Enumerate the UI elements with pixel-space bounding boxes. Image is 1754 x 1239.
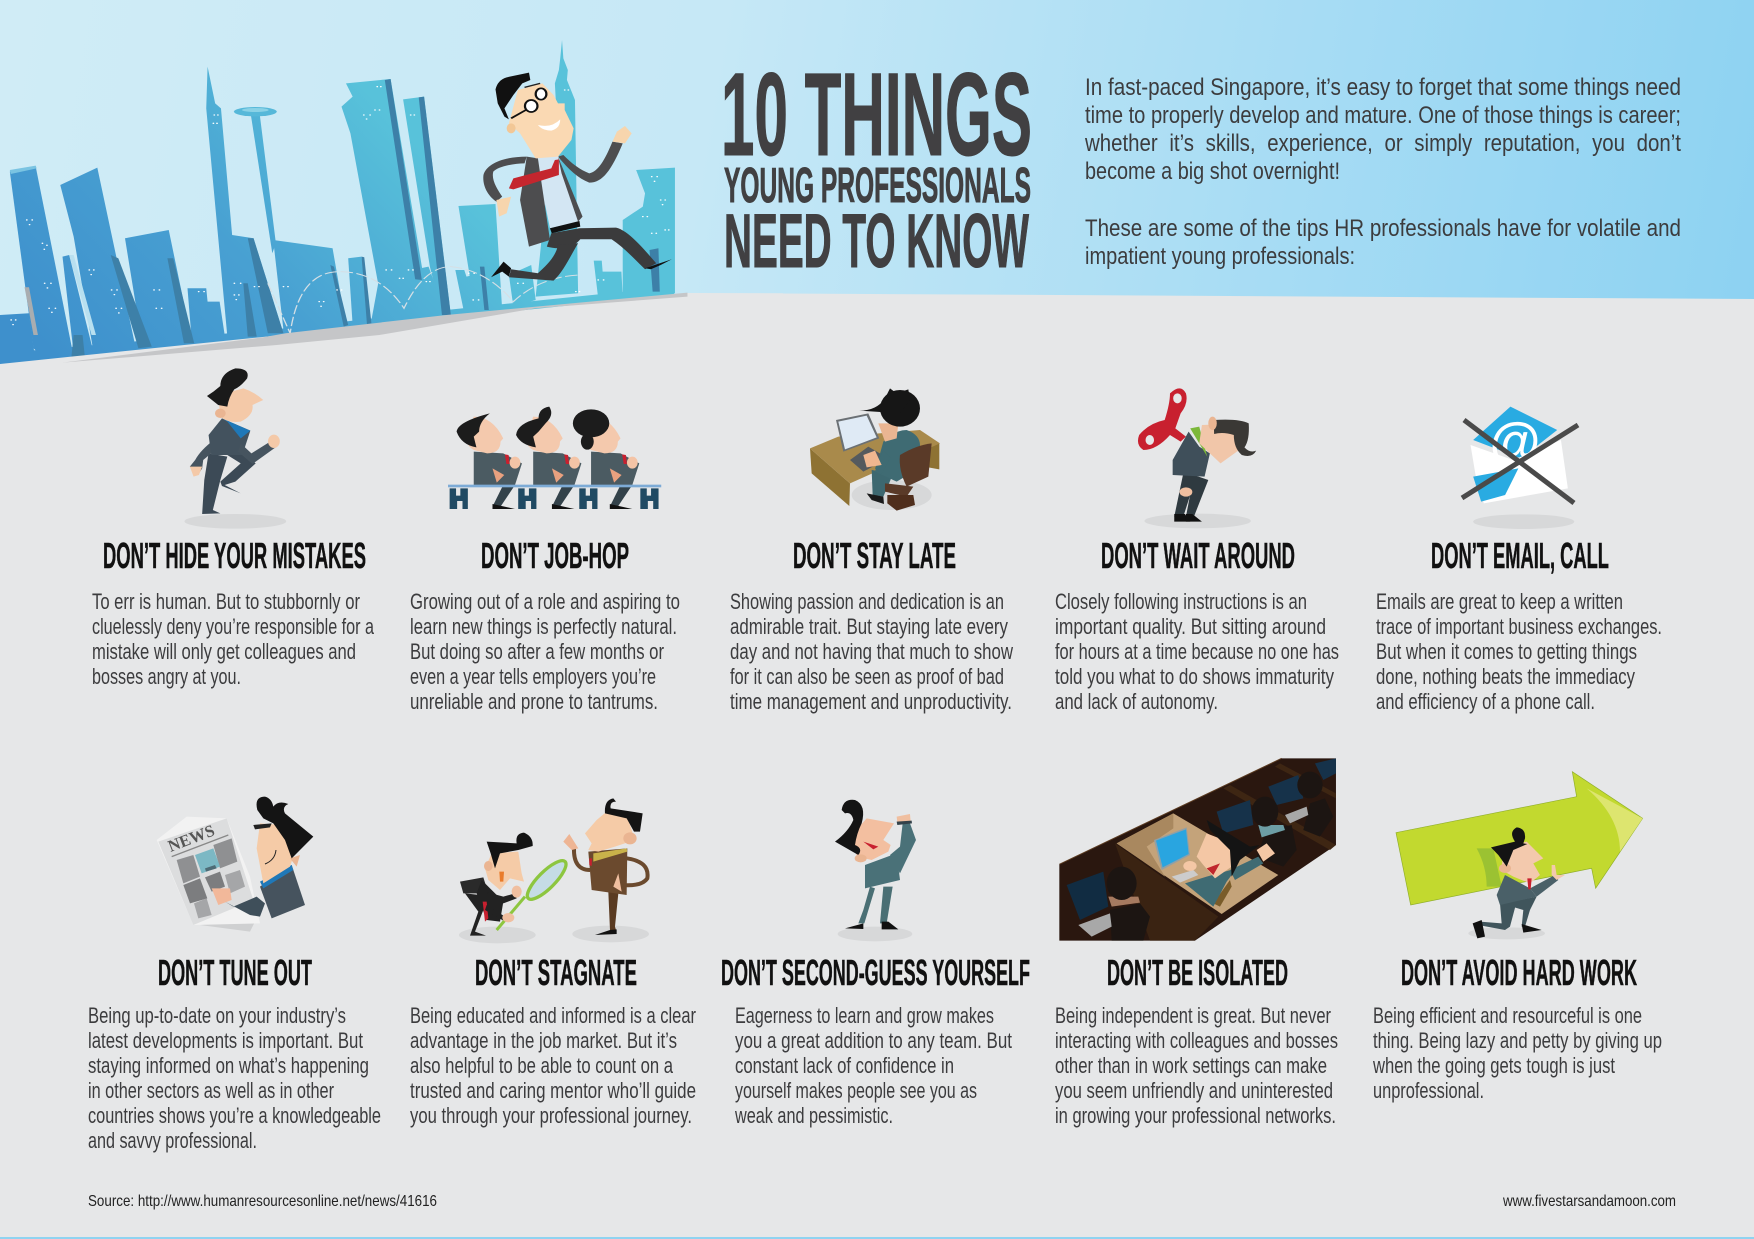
body text: admirable trait. But staying late every — [730, 614, 1008, 639]
title: 10 THINGS — [721, 49, 1032, 181]
body text: told you what to do shows immaturity — [1055, 664, 1334, 689]
body text: in growing your professional networks. — [1055, 1103, 1336, 1128]
text: DON’T SECOND-GUESS YOURSELF — [721, 952, 1030, 993]
body text: for hours at a time because no one has — [1055, 639, 1339, 664]
panel: don't second-guess yourself — [721, 800, 1030, 1128]
panel: don't wait around — [1055, 388, 1339, 714]
body text: unprofessional. — [1373, 1078, 1484, 1103]
body text: you a great addition to any team. But — [735, 1028, 1012, 1053]
body text: But when it comes to getting things — [1376, 639, 1637, 664]
panel: don't stagnate — [410, 798, 696, 1128]
body text — [730, 589, 1013, 714]
body text: for it can also be seen as proof of bad — [730, 664, 1004, 689]
icon: three men on a bench — [448, 407, 661, 509]
body text: Growing out of a role and aspiring to — [410, 589, 680, 614]
heading: DON’T JOB-HOP — [481, 535, 629, 576]
intro text: become a big shot overnight! — [1085, 158, 1340, 185]
body text: trace of important business exchanges. — [1376, 614, 1662, 639]
body text: time management and unproductivity. — [730, 689, 1012, 714]
body text: other than in work settings can make — [1055, 1053, 1327, 1078]
body text: Emails are great to keep a written — [1376, 589, 1623, 614]
icon: crossed out email: @ — [1490, 413, 1540, 471]
body text — [734, 1003, 1012, 1128]
website footer: www.fivestarsandamoon.com — [1502, 1193, 1676, 1210]
body text: Being independent is great. But never — [1055, 1003, 1331, 1028]
heading: DON’T BE ISOLATED — [1107, 952, 1288, 993]
body text: when the going gets tough is just — [1372, 1053, 1615, 1078]
icon: man carrying green arrow — [1396, 772, 1643, 939]
header band — [0, 0, 1754, 365]
heading: DON’T STAY LATE — [793, 535, 956, 576]
icon: man scratching head — [835, 800, 916, 941]
body text — [1372, 1003, 1662, 1103]
body text — [410, 1003, 696, 1128]
body text — [410, 589, 680, 714]
body text: yourself makes people see you as — [735, 1078, 977, 1103]
heading: DON’T TUNE OUT — [158, 952, 312, 993]
body text: unreliable and prone to tantrums. — [410, 689, 658, 714]
body text — [1055, 1003, 1338, 1128]
body text: cluelessly deny you’re responsible for a — [92, 614, 375, 639]
body text: interacting with colleagues and bosses — [1055, 1028, 1338, 1053]
panel: don't tune out — [88, 797, 381, 1153]
body text — [92, 589, 375, 689]
body text: latest developments is important. But — [88, 1028, 363, 1053]
intro text: impatient young professionals: — [1085, 243, 1355, 270]
body text: even a year tells employers you’re — [410, 664, 656, 689]
illustration: running man — [483, 73, 672, 281]
icon: wind-up man — [1138, 388, 1256, 528]
body text: Being up-to-date on your industry’s — [88, 1003, 346, 1028]
body text: you through your professional journey. — [410, 1103, 692, 1128]
body text — [1055, 589, 1339, 714]
body text: trusted and caring mentor who’ll guide — [410, 1078, 696, 1103]
body text: mistake will only get colleagues and — [92, 639, 356, 664]
body text — [1376, 589, 1662, 714]
body text: To err is human. But to stubbornly or — [92, 589, 360, 614]
title: YOUNG PROFESSIONALS — [724, 159, 1031, 213]
illustration: city skyline — [0, 40, 783, 380]
body text: Being educated and informed is a clear — [410, 1003, 696, 1028]
body text: you seem unfriendly and uninterested — [1055, 1078, 1333, 1103]
heading: DON’T STAGNATE — [475, 952, 637, 993]
panel: don't job-hop — [410, 407, 680, 714]
body text: day and not having that much to show — [730, 639, 1013, 664]
title — [721, 49, 1032, 284]
icon: man reading newspaper — [157, 797, 313, 932]
icon: man at desk — [810, 388, 940, 511]
icon: crossed out email — [1462, 407, 1578, 529]
icon: office cubicles — [1059, 758, 1336, 941]
body text: But doing so after a few months or — [410, 639, 664, 664]
body text: done, nothing beats the immediacy — [1376, 664, 1635, 689]
icon: man reading newspaper: NEWS — [165, 821, 217, 856]
body text: Being efficient and resourceful is one — [1373, 1003, 1642, 1028]
bottom line — [0, 1237, 1754, 1239]
body text: also helpful to be able to count on a — [410, 1053, 674, 1078]
icon: man sneaking — [184, 368, 286, 529]
body text: Closely following instructions is an — [1055, 589, 1307, 614]
panel: don't avoid hard work — [1372, 772, 1662, 1103]
body text: advantage in the job market. But it’s — [410, 1028, 677, 1053]
body text: constant lack of confidence in — [735, 1053, 954, 1078]
body text: countries shows you’re a knowledgeable — [88, 1103, 381, 1128]
body text: and lack of autonomy. — [1055, 689, 1218, 714]
body text — [88, 1003, 381, 1153]
body text: Eagerness to learn and grow makes — [735, 1003, 994, 1028]
body text: bosses angry at you. — [92, 664, 241, 689]
body text: thing. Being lazy and petty by giving up — [1373, 1028, 1662, 1053]
body text: Showing passion and dedication is an — [730, 589, 1004, 614]
title: NEED TO KNOW — [724, 199, 1029, 284]
body text: learn new things is perfectly natural. — [410, 614, 677, 639]
panel: don't hide your mistakes — [92, 368, 375, 689]
body text: weak and pessimistic. — [734, 1103, 893, 1128]
body text: and efficiency of a phone call. — [1376, 689, 1595, 714]
source footer: Source: http://www.humanresourcesonline.net/news/41616 — [88, 1193, 437, 1210]
intro text — [1084, 74, 1681, 270]
heading: DON’T WAIT AROUND — [1101, 535, 1295, 576]
body text: and savvy professional. — [88, 1128, 257, 1153]
body text: staying informed on what’s happening — [88, 1053, 369, 1078]
heading: DON’T HIDE YOUR MISTAKES — [103, 535, 366, 576]
body text: in other sectors as well as in other — [88, 1078, 334, 1103]
panel: don't be isolated — [1055, 758, 1338, 1128]
body text: important quality. But sitting around — [1055, 614, 1326, 639]
panel: don't email, call — [1376, 407, 1662, 714]
panel: don't stay late — [730, 388, 1013, 714]
icon: mentor and man with magnifying glass — [459, 798, 649, 943]
